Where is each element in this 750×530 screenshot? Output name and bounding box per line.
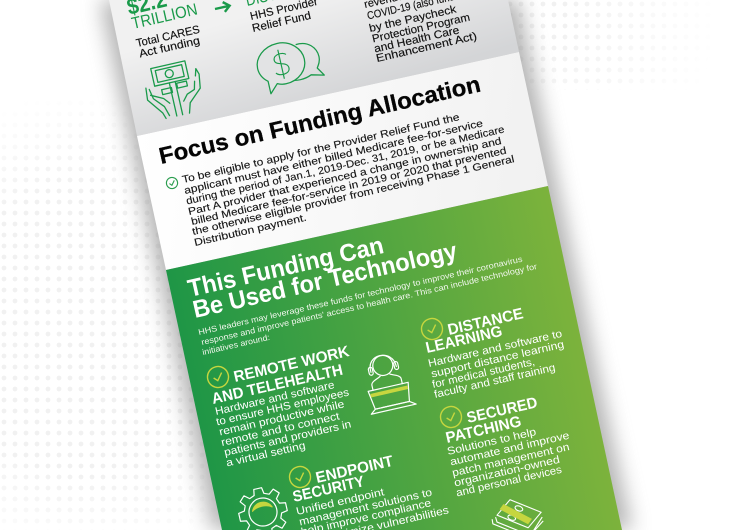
text: revenue note: and Health Care [373, 24, 461, 55]
heading [424, 305, 525, 357]
arrow [214, 1, 231, 14]
body: to ensure HHS employees [215, 386, 351, 428]
heading: LEARNING [424, 323, 504, 357]
body [427, 328, 565, 401]
item: endpoint security [287, 453, 451, 530]
body: for medical students, [431, 356, 536, 391]
text: revenue note: Protection Program [371, 12, 471, 45]
body: faculty and staff training [433, 362, 557, 401]
stat: total CARES funding: Total CARES [135, 24, 201, 50]
text: revenue note: by the Paycheck [368, 3, 458, 35]
icon: dollar speech bubbles [253, 35, 326, 95]
body: Unified endpoint [295, 486, 385, 518]
icon: hands with money [141, 58, 207, 122]
stat: total CARES funding: Act funding [138, 35, 201, 60]
item: distance learning [419, 305, 565, 401]
text: eligibility paragraph: the otherwise eligible provider from receiving Phase 1 General [191, 154, 515, 238]
item: secured patching [438, 394, 571, 499]
text: eligibility paragraph: billed Medicare fee-for-service in 2019 or 2020 that prevented [190, 146, 508, 228]
stat: provider relief fund: Relief Fund [251, 10, 312, 35]
text: eligibility paragraph: Part A provider that experienced a change in ownership and [187, 136, 503, 218]
heading [444, 394, 539, 447]
icon: check [287, 464, 313, 490]
icon: check [438, 404, 464, 430]
heading [291, 453, 395, 506]
body: and personal devices [455, 464, 564, 499]
body [446, 426, 571, 499]
body [214, 379, 352, 469]
stat: total CARES funding [124, 0, 201, 60]
icon: check [205, 364, 231, 390]
heading: PATCHING [444, 413, 523, 447]
body: management solutions to [298, 487, 433, 528]
paper shadow [100, 0, 632, 530]
text: eligibility paragraph: Distribution payment. [193, 213, 308, 249]
text: intro [197, 255, 538, 357]
heading: AND TELEHEALTH [210, 362, 345, 408]
heading: This Funding Can [185, 232, 386, 303]
text: revenue note: Enhancement Act) [375, 30, 478, 65]
text: eligibility paragraph: To be eligible to apply for the Provider Relief Fund the [181, 112, 461, 186]
body: Solutions to help [446, 426, 537, 458]
text: intro: response and improve patients' access to health care. This can include technology for [200, 262, 538, 347]
icon: stack of money [491, 496, 546, 530]
icon: check [419, 316, 445, 342]
body: remote and to connect [220, 410, 341, 449]
heading: DISTANCE [446, 305, 525, 339]
body: remain productive while [218, 398, 345, 438]
icon: person at laptop with headset [359, 350, 416, 414]
icon: check circle [165, 176, 179, 190]
heading: REMOTE WORK [232, 343, 352, 386]
dollar sign [271, 48, 291, 80]
text: eligibility paragraph: during the period of Jan.1, 2019-Dec. 31, 2019, or be a Medicare [185, 124, 506, 207]
text: eligibility paragraph [181, 112, 515, 249]
heading: Be Used for Technology [190, 238, 460, 324]
panel: grey funding summary [109, 0, 519, 136]
text: revenue note [363, 0, 478, 65]
item: remote work [205, 343, 352, 469]
panel: focus on funding allocation [137, 52, 548, 270]
body: a virtual setting [225, 440, 307, 469]
heading: SECURED [465, 394, 539, 427]
body [295, 486, 451, 530]
text: intro: HHS leaders may leverage these funds for technology to improve their coronavirus [197, 255, 523, 337]
icon: gear [234, 483, 292, 530]
heading: Focus on Funding Allocation [156, 71, 483, 169]
body: Hardware and software [214, 379, 336, 418]
heading: SECURITY [291, 473, 367, 506]
body: support distance learning [430, 339, 565, 380]
panel: funding can be used for technology [166, 186, 622, 530]
body: patch management on [451, 441, 571, 479]
heading: ENDPOINT [314, 453, 395, 487]
stat: provider relief fund [244, 0, 336, 35]
text: intro: initiatives around: [201, 333, 271, 357]
body: Hardware and software to [427, 328, 563, 370]
body: patients and providers in [223, 418, 352, 459]
body: automate and improve [449, 430, 571, 468]
body: organization-owned [453, 454, 561, 489]
text: eligibility paragraph: applicant must have either billed Medicare fee-for-service [183, 118, 484, 197]
